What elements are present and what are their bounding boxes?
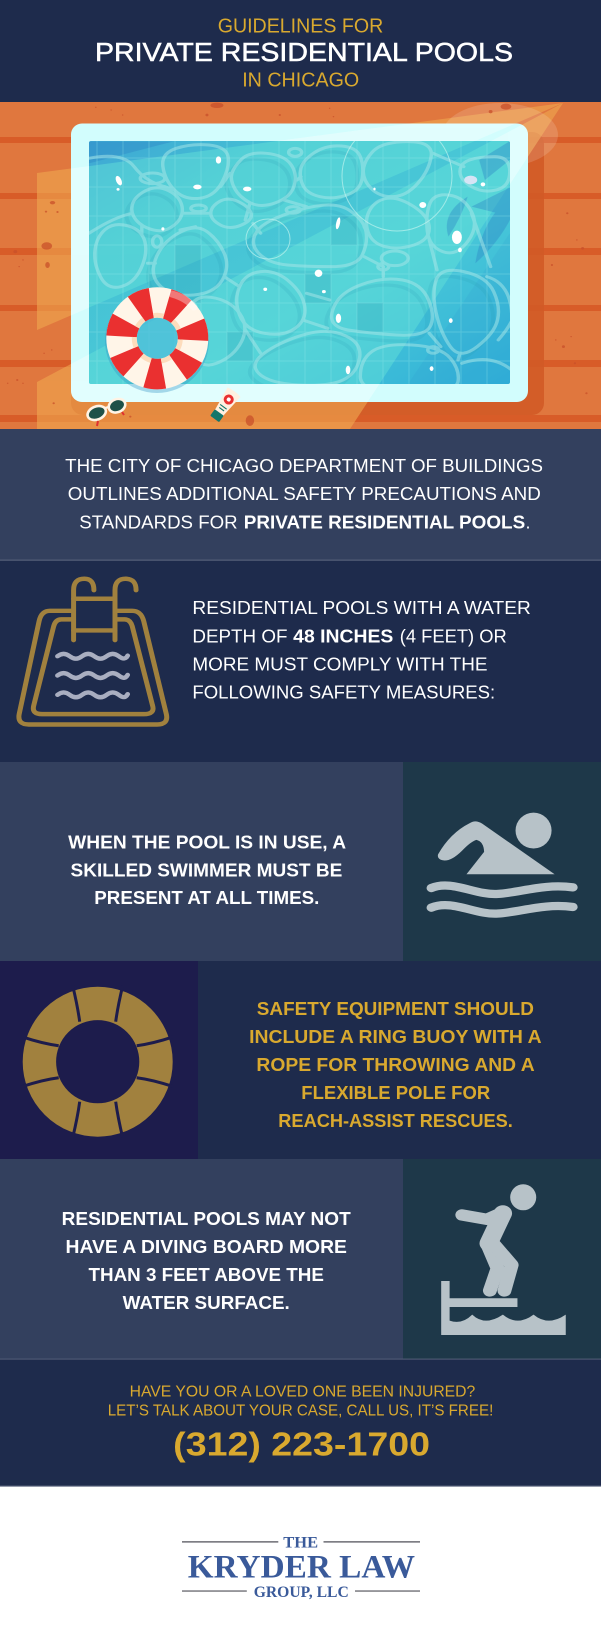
panel: water depth xyxy=(0,561,601,762)
depth text bold measure: 48 INCHES xyxy=(293,626,393,646)
header: title xyxy=(0,0,601,102)
sunlight on rim xyxy=(71,124,528,402)
deck planks xyxy=(0,137,601,422)
depth text line 1: RESIDENTIAL POOLS WITH A WATER xyxy=(192,598,531,618)
panel: call to action xyxy=(0,1359,601,1487)
depth text line 2 end: (4 FEET) OR xyxy=(400,626,507,646)
icon: pool with ladder xyxy=(19,579,167,724)
depth text line 3: MORE MUST COMPLY WITH THE xyxy=(192,654,488,674)
intro line 1: THE CITY OF CHICAGO DEPARTMENT OF BUILDINGS xyxy=(65,456,543,476)
invitation line: LET’S TALK ABOUT YOUR CASE, CALL US, IT’S FREE! xyxy=(108,1402,493,1419)
intro line 3: STANDARDS FOR xyxy=(79,512,238,532)
tile grid xyxy=(89,141,510,384)
pool coping rim xyxy=(71,124,528,402)
depth text line 4: FOLLOWING SAFETY MEASURES: xyxy=(192,682,495,702)
logo word: group llc: GROUP, LLC xyxy=(254,1584,349,1601)
panel: skilled swimmer xyxy=(0,762,601,961)
life ring xyxy=(105,289,209,393)
equipment text line 1: SAFETY EQUIPMENT SHOULD xyxy=(257,999,534,1019)
equipment text line 4: FLEXIBLE POLE FOR xyxy=(301,1083,490,1103)
palm shadow xyxy=(89,142,510,263)
depth text line 2 start: DEPTH OF xyxy=(192,626,288,646)
sunglasses xyxy=(85,396,127,426)
logo word: the: THE xyxy=(283,1534,318,1551)
equipment text line 3: ROPE FOR THROWING AND A xyxy=(256,1055,535,1075)
icon: diver on board xyxy=(441,1184,566,1335)
darker tiles xyxy=(149,216,383,361)
dark caustics xyxy=(125,150,450,384)
logo word: kryder law: KRYDER LAW xyxy=(188,1549,415,1585)
panel: intro text xyxy=(0,429,601,561)
diving text line 2: HAVE A DIVING BOARD MORE xyxy=(66,1237,347,1257)
diving text line 3: THAN 3 FEET ABOVE THE xyxy=(88,1265,324,1285)
sunlight beams on deck xyxy=(37,103,563,429)
equipment text line 2: INCLUDE A RING BUOY WITH A xyxy=(249,1027,542,1047)
diving text line 4: WATER SURFACE. xyxy=(123,1293,290,1313)
light caustics xyxy=(89,142,514,393)
deck speckles xyxy=(7,103,588,426)
intro bold phrase: PRIVATE RESIDENTIAL POOLS xyxy=(244,512,525,532)
icon: ring buoy xyxy=(22,986,174,1138)
title line: in chicago: IN CHICAGO xyxy=(242,70,359,92)
panel: diving board xyxy=(0,1159,601,1359)
intro line 2: OUTLINES ADDITIONAL SAFETY PRECAUTIONS AND xyxy=(68,484,541,504)
illustration: swimming pool from above xyxy=(0,102,601,429)
light rings on water xyxy=(246,141,452,260)
panel: safety equipment xyxy=(0,961,601,1159)
icon: swimmer xyxy=(431,813,573,914)
title line: private residential pools: PRIVATE RESIDENTIAL POOLS xyxy=(95,37,513,67)
equipment text line 5: REACH-ASSIST RESCUES. xyxy=(278,1111,513,1131)
pool shadow xyxy=(71,132,544,415)
water highlights xyxy=(114,156,485,374)
pool water xyxy=(89,141,510,402)
intro period: . xyxy=(526,512,531,532)
sunscreen tube xyxy=(210,388,240,422)
logo: the kryder law group xyxy=(182,1534,420,1601)
phone number: (312) 223-1700 xyxy=(173,1426,430,1463)
swimmer text line 1: WHEN THE POOL IS IN USE, A xyxy=(68,832,346,852)
sunlight in water xyxy=(89,141,510,384)
swimmer text line 3: PRESENT AT ALL TIMES. xyxy=(94,888,319,908)
diving text line 1: RESIDENTIAL POOLS MAY NOT xyxy=(62,1209,351,1229)
swimmer text line 2: SKILLED SWIMMER MUST BE xyxy=(70,860,342,880)
question line: HAVE YOU OR A LOVED ONE BEEN INJURED? xyxy=(130,1383,475,1400)
title line: guidelines for: GUIDELINES FOR xyxy=(218,15,383,37)
round light patch xyxy=(442,103,558,167)
